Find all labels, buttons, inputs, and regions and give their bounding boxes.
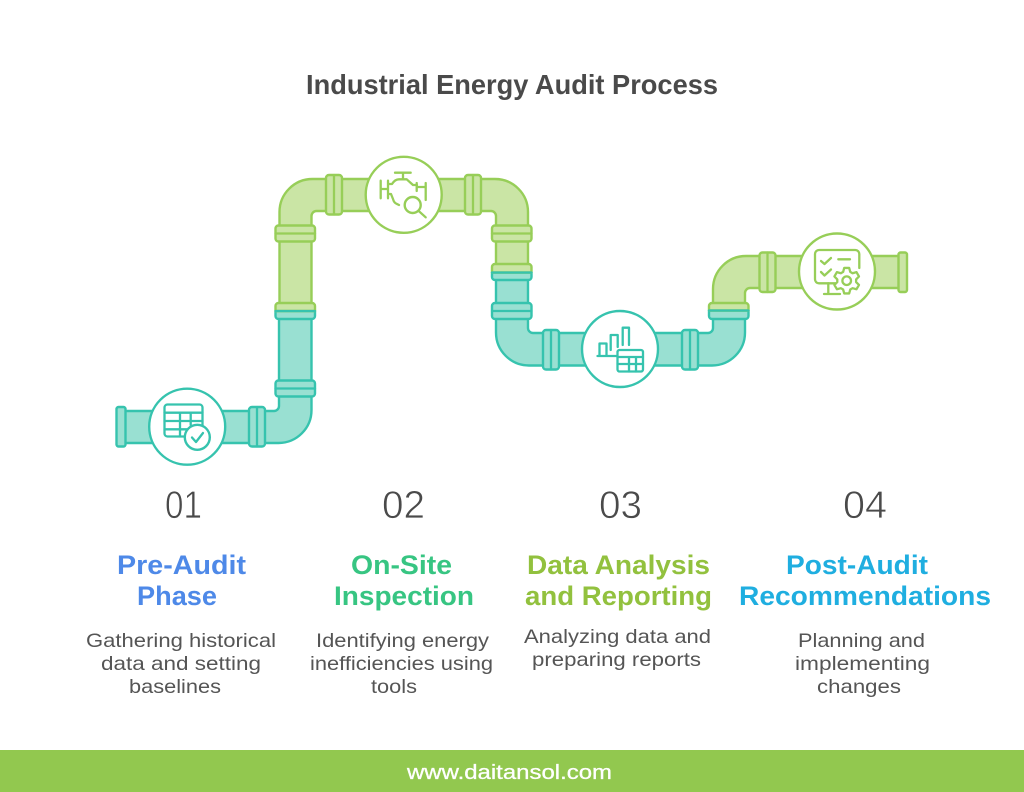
pipe segment: step 1 teal	[116, 318, 315, 446]
title: Industrial Energy Audit Process	[306, 69, 718, 100]
heading: Pre-Audit Phase	[117, 550, 246, 611]
description: step 03: preparing reports	[532, 649, 701, 671]
pipe segment: step 3 teal	[492, 273, 745, 370]
heading: Data Analysis and Reporting: and Reporting	[525, 581, 712, 611]
description: step 03	[524, 626, 711, 671]
heading: Data Analysis and Reporting	[525, 550, 712, 611]
pipe joints: green to teal couplings	[276, 264, 748, 319]
description: step 01: baselines	[129, 676, 221, 698]
description: step 03: Analyzing data and	[524, 626, 711, 648]
description: step 01: Gathering historical	[86, 630, 276, 652]
footer banner	[0, 750, 1024, 792]
icon: bar chart with table	[582, 311, 658, 387]
step number 03: 03	[599, 484, 642, 527]
step number 02: 02	[382, 484, 425, 527]
icon: valve with magnifier	[366, 157, 442, 233]
panel: step 02 text	[310, 484, 493, 698]
panel: step 04 text	[739, 484, 991, 698]
description: step 02: tools	[371, 676, 417, 698]
description: step 02: inefficiencies using	[310, 653, 493, 675]
panel: step 03 text	[524, 484, 712, 671]
description: step 04: changes	[817, 676, 901, 698]
step number 01: 01	[165, 484, 202, 527]
description: step 01	[86, 630, 276, 698]
pipe segment: step 4 green	[713, 252, 907, 310]
heading: Post-Audit Recommendations: Post-Audit	[786, 550, 928, 580]
description: step 04: Planning and	[798, 630, 925, 652]
description: step 04	[795, 630, 930, 698]
step number 04: 04	[843, 484, 887, 527]
heading: On-Site Inspection: On-Site	[351, 550, 452, 580]
heading: Post-Audit Recommendations: Recommendations	[739, 581, 991, 611]
description: step 04: implementing	[795, 653, 930, 675]
heading: Data Analysis and Reporting: Data Analysis	[527, 550, 710, 580]
heading: Pre-Audit Phase: Phase	[137, 581, 217, 611]
pipeline diagram	[116, 157, 907, 465]
description: step 02	[310, 630, 493, 698]
heading: Post-Audit Recommendations	[739, 550, 991, 611]
description: step 02: Identifying energy	[316, 630, 489, 652]
pipe segment: step 2 green	[276, 175, 532, 310]
description: step 01: data and setting	[101, 653, 261, 675]
heading: Pre-Audit Phase: Pre-Audit	[117, 550, 246, 580]
icon: table with check mark	[149, 389, 225, 465]
heading: On-Site Inspection	[334, 550, 474, 611]
panel: step 01 text	[86, 484, 276, 698]
icon: monitor checklist with gear	[799, 234, 875, 310]
footer website text: www.daitansol.com	[406, 761, 612, 784]
heading: On-Site Inspection: Inspection	[334, 581, 474, 611]
